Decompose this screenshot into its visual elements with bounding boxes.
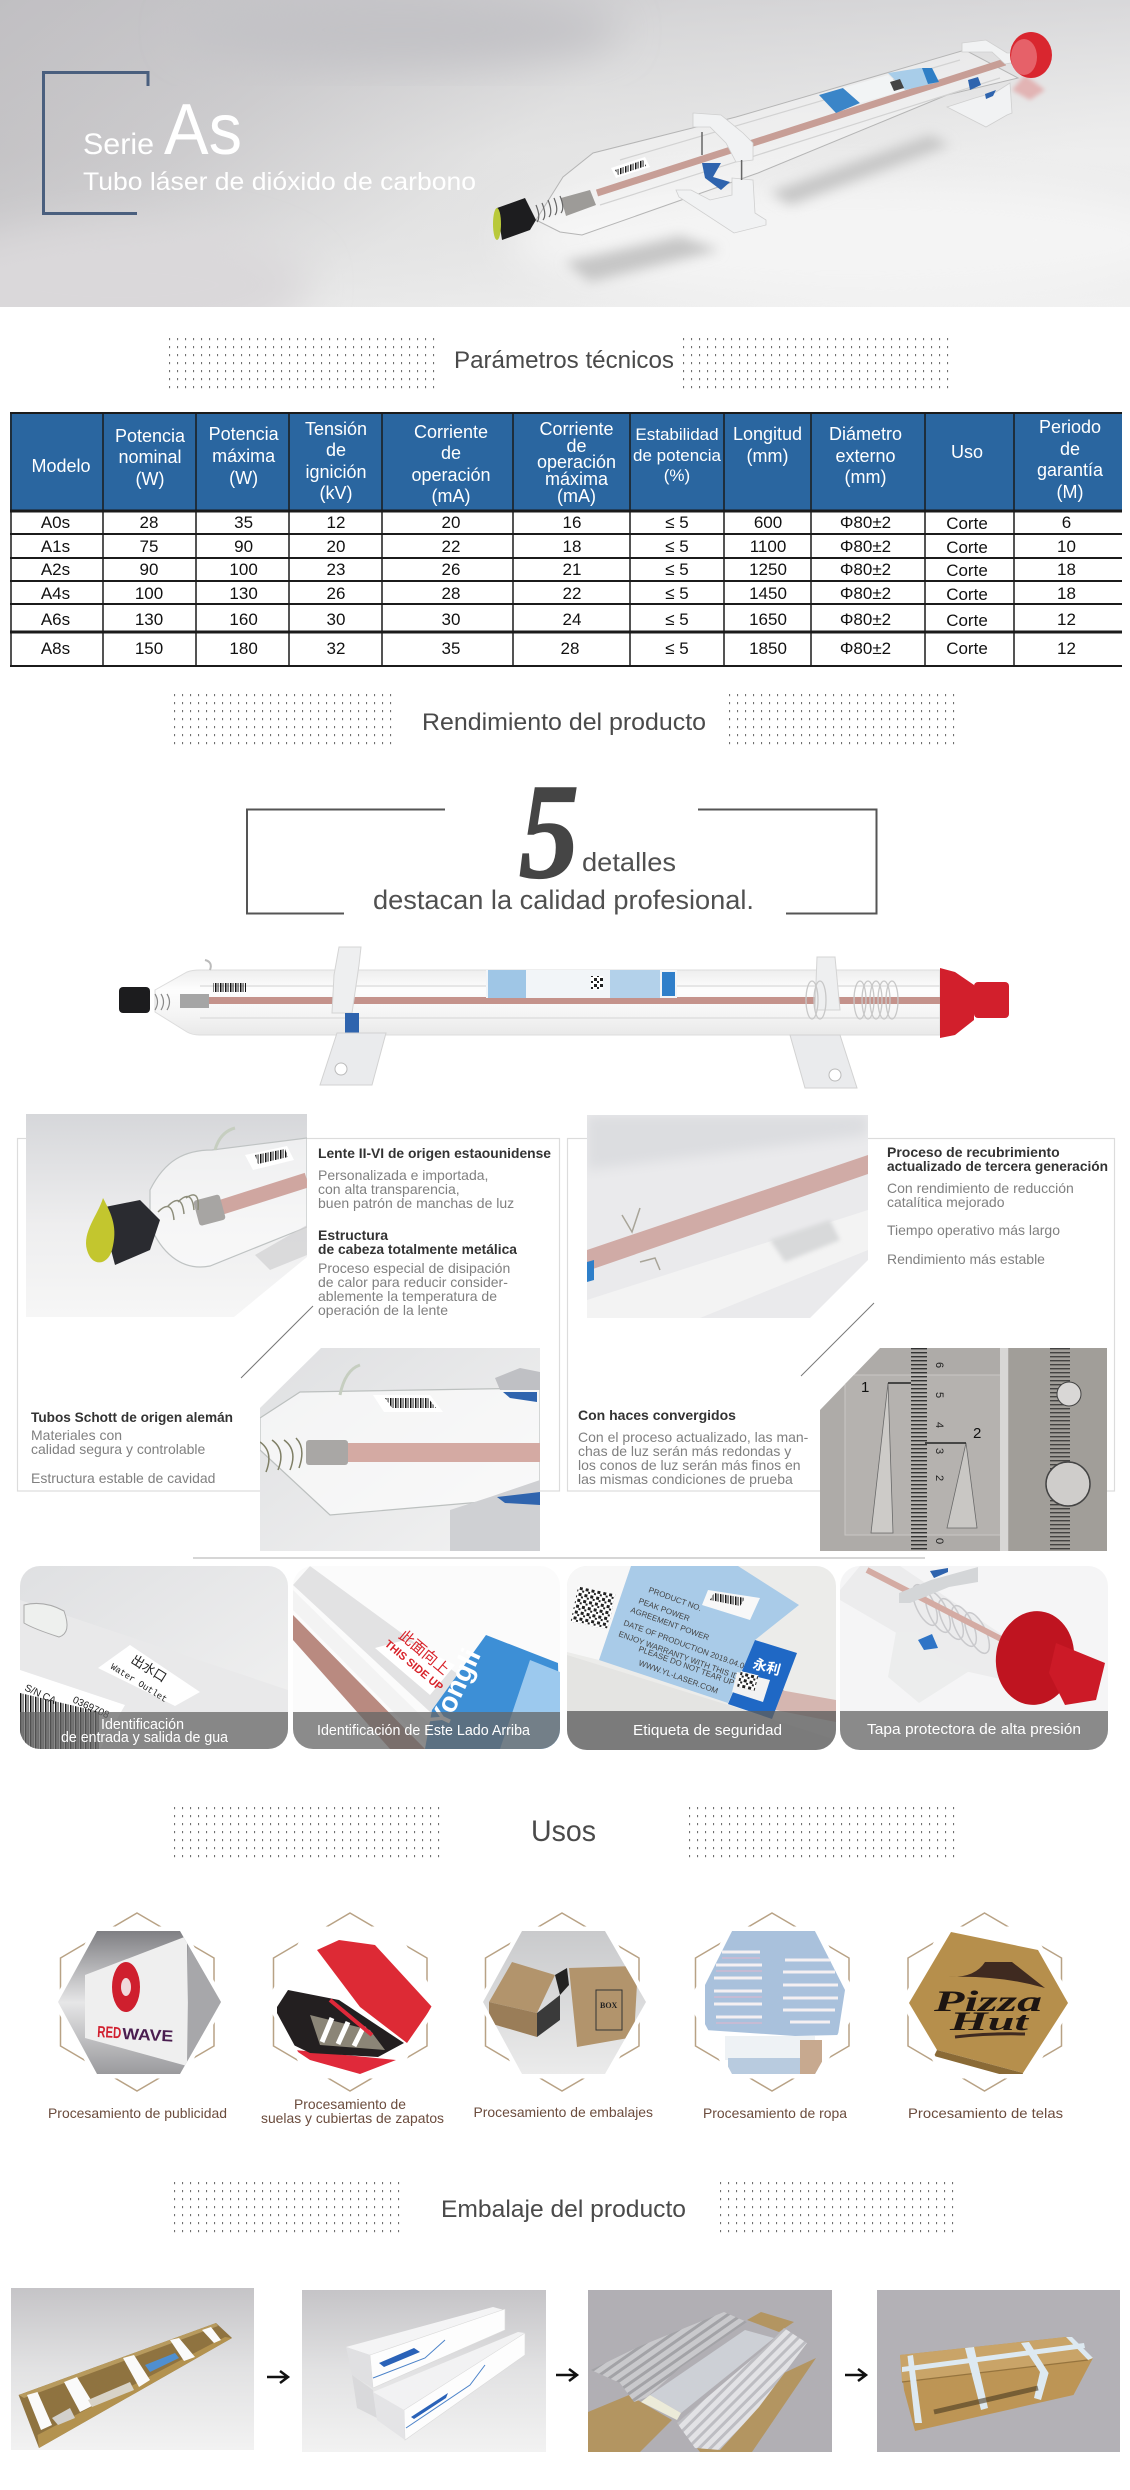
detail photo: lens head	[26, 1114, 307, 1317]
text: Proceso de recubrimiento: Con rendimiento de reducción	[887, 1180, 1074, 1196]
table row A4s: 130	[229, 584, 258, 603]
text: Estructura de cabeza	[318, 1227, 517, 1318]
packaging photo 3: air cushions	[588, 2290, 832, 2452]
label: Procesamiento de embalajes	[474, 2104, 653, 2120]
table row A0s: 12	[327, 513, 345, 532]
hero title: As	[164, 90, 242, 170]
product photo: horizontal laser tube	[119, 947, 1009, 1088]
text: Lente II-VI: con alta transparencia,	[318, 1181, 460, 1197]
table header: Corriente	[414, 422, 488, 442]
red protective cap	[940, 968, 1009, 1038]
text: Con haces convergidos: Con haces convergidos	[578, 1407, 736, 1423]
table header: Estabilidad	[635, 425, 719, 444]
table row A8s: 35	[442, 639, 460, 658]
table header: de	[566, 436, 587, 456]
table row A6s: 24	[563, 610, 581, 629]
this side up tag: THIS SIDE UP	[382, 1638, 445, 1694]
table row A8s: Corte	[946, 639, 988, 658]
pink inner tube	[597, 62, 1005, 193]
photo	[693, 1931, 856, 2074]
number 5: 5	[519, 757, 579, 907]
table row A1s: 18	[563, 537, 581, 556]
panel frame	[568, 1138, 1114, 1491]
table header: (W)	[229, 468, 258, 488]
this side up tag	[375, 1627, 455, 1695]
hero title	[84, 104, 475, 190]
connector line	[241, 1306, 313, 1378]
table row A4s	[41, 584, 1076, 604]
blue label band	[425, 1635, 560, 1749]
table header: Potencia	[115, 426, 186, 446]
text: Lente II-VI	[318, 1145, 551, 1211]
card: this side up identification: Yongli	[423, 1644, 487, 1733]
text: Con haces convergidos: las mismas condiciones de prueba	[578, 1471, 793, 1487]
hexagon outline	[908, 1913, 1062, 2091]
QR code	[571, 1586, 615, 1630]
text: Con haces convergidos	[578, 1407, 809, 1487]
table row A4s: 18	[1057, 584, 1076, 603]
table row A2s: Φ80±2	[840, 560, 891, 579]
product label text: PLEASE DO NOT TEAR UP	[637, 1644, 735, 1687]
table header: (mm)	[747, 446, 788, 466]
table grid	[10, 413, 1122, 666]
table row A4s: Corte	[946, 585, 988, 604]
carton interior	[19, 2323, 232, 2448]
label: suelas y cubiertas de zapatos	[261, 2110, 444, 2126]
arrow 1	[267, 2371, 288, 2383]
label: Procesamiento de	[294, 2096, 406, 2112]
hero laser tube	[493, 32, 1052, 282]
text: Estructura de cabeza: Estructura	[318, 1227, 388, 1243]
table header: (mA)	[557, 486, 596, 506]
caption bar: Identificación de Este Lado Arriba	[317, 1722, 531, 1739]
table header: de	[441, 443, 461, 463]
photo: Hut	[948, 2007, 1029, 2036]
card: high pressure protective cap	[840, 1566, 1108, 1750]
heading bracket	[247, 810, 876, 914]
barcode tag	[611, 157, 650, 178]
table header: de	[1060, 439, 1080, 459]
caption bar: de entrada y salida de gua	[61, 1729, 229, 1746]
text: Tubos Schott: Tubos Schott de origen alemán	[31, 1409, 233, 1425]
table row A2s	[41, 560, 1076, 580]
hero title: Tubo láser de dióxido de carbono	[83, 168, 476, 196]
table row A0s: 28	[140, 513, 158, 532]
carton front wall	[38, 2337, 232, 2448]
photo: BOX	[600, 2001, 618, 2010]
table header: máxima	[212, 446, 276, 466]
table header: nominal	[118, 447, 182, 467]
table row A6s: 130	[135, 610, 163, 629]
spring	[536, 196, 563, 222]
table row A1s: 10	[1057, 537, 1076, 556]
table header: Periodo	[1039, 417, 1101, 437]
details panel: right	[568, 1115, 1114, 1551]
table header: Diámetro	[829, 424, 902, 444]
product label text: PRODUCT NO.	[647, 1585, 703, 1613]
black end cap	[497, 198, 536, 240]
table row A1s: 1100	[750, 537, 786, 556]
clamp	[888, 1567, 978, 1703]
text: Proceso de recubrimiento: catalítica mejorado	[887, 1194, 1005, 1210]
table row A1s	[41, 537, 1076, 557]
table header: operación	[537, 452, 616, 472]
photo	[271, 1931, 434, 2074]
details panel: left	[18, 1114, 560, 1551]
table row A1s: 20	[327, 537, 345, 556]
product label text: WWW.YL-LASER.COM	[637, 1658, 720, 1696]
text: Proceso de recubrimiento: Proceso de recubrimiento	[887, 1144, 1060, 1160]
photo	[483, 1931, 646, 2074]
table row A8s: 32	[327, 639, 345, 658]
safety seal	[728, 1640, 797, 1719]
table row A0s: ≤ 5	[665, 513, 689, 532]
text: Con haces convergidos: los conos de luz serán más finos en	[578, 1457, 801, 1473]
water outlet tag	[98, 1645, 200, 1706]
product label text: DATE OF PRODUCTION 2019.04.09	[622, 1618, 750, 1672]
glass body	[536, 50, 1018, 235]
carton	[900, 2337, 1093, 2431]
table row A6s: 12	[1057, 610, 1076, 629]
packaging photo 1: tube in carton	[11, 2288, 254, 2450]
text: Estructura de cabeza: de cabeza totalmente metálica	[318, 1241, 517, 1257]
card: water inlet and outlet identification	[20, 1566, 288, 1749]
table row A2s: 23	[327, 560, 345, 579]
card: safety label	[567, 1566, 836, 1750]
panel frame	[18, 1138, 560, 1491]
table row A8s: 1850	[749, 639, 787, 658]
table header: de potencia	[633, 446, 721, 465]
table row A4s: 100	[135, 584, 163, 603]
table row A6s: 1650	[749, 610, 787, 629]
table row A4s: ≤ 5	[665, 584, 689, 603]
table row A0s: 600	[754, 513, 782, 532]
table row A0s: 16	[563, 513, 581, 532]
photo	[909, 1932, 1068, 2080]
application 5: fabrics	[906, 1913, 1069, 2121]
table row A4s: A4s	[41, 584, 70, 603]
tube label	[486, 970, 677, 998]
table row A0s: 35	[234, 513, 253, 532]
water outlet tag: Water Outlet	[108, 1662, 169, 1705]
detail photo: beam measurement: 3	[933, 1448, 945, 1454]
clear coil	[912, 1584, 990, 1654]
caption bar	[20, 1712, 288, 1749]
table row A0s: Corte	[946, 514, 988, 533]
table row A6s: 160	[229, 610, 258, 629]
caption bar	[293, 1712, 560, 1749]
light air cushions	[677, 2328, 807, 2450]
table row A8s: Φ80±2	[840, 639, 891, 658]
front clamp	[676, 113, 766, 233]
table row A1s: A1s	[41, 537, 70, 556]
table row A1s: Φ80±2	[840, 537, 891, 556]
table header: (M)	[1057, 482, 1083, 502]
white tray	[650, 2330, 774, 2413]
table row A0s: Φ80±2	[840, 513, 891, 532]
table header: (W)	[136, 469, 164, 489]
lower box	[352, 2332, 525, 2440]
section heading: Rendimiento del producto	[173, 694, 960, 750]
white sticker area	[567, 1566, 631, 1660]
text: Proceso de recubrimiento	[887, 1144, 1108, 1267]
heading text: destacan la calidad profesional.	[373, 885, 754, 915]
photo: Pizza	[932, 1985, 1042, 2018]
table header: de	[326, 440, 346, 460]
caption bar: Identificación	[101, 1716, 184, 1733]
table header: máxima	[545, 469, 609, 489]
divider	[193, 1557, 925, 1559]
table row A2s: Corte	[946, 561, 988, 580]
table row A6s: 30	[327, 610, 345, 629]
table row A4s: 1450	[749, 584, 787, 603]
printed text strip	[934, 2388, 1038, 2412]
arrow 3	[845, 2369, 866, 2381]
text: Estructura de cabeza: Proceso especial de disipación	[318, 1260, 510, 1276]
table header: (mm)	[845, 467, 886, 487]
red mushroom cap	[990, 1606, 1080, 1710]
caption bar: Tapa protectora de alta presión	[867, 1721, 1081, 1738]
table row A0s: 20	[442, 513, 460, 532]
text: Tubos Schott: Materiales con	[31, 1427, 122, 1443]
table header: garantía	[1037, 460, 1104, 480]
hero bracket	[44, 72, 148, 214]
application 3: packaging	[474, 1913, 653, 2120]
text: Tubos Schott	[31, 1409, 233, 1486]
text: Estructura de cabeza: ablemente la temperatura de	[318, 1288, 497, 1304]
table header	[10, 413, 1122, 511]
dark air cushions	[591, 2312, 747, 2402]
left clamp	[320, 947, 386, 1085]
table row A8s: A8s	[41, 639, 70, 658]
section heading: Parámetros técnicos: Parámetros técnicos	[454, 347, 674, 374]
right clamp	[790, 957, 898, 1088]
text: Lente II-VI: buen patrón de manchas de luz	[318, 1195, 514, 1211]
section heading: Embalaje del producto	[173, 2182, 960, 2238]
label: Procesamiento de telas	[908, 2105, 1063, 2121]
text: Proceso de recubrimiento: actualizado de tercera generación	[887, 1158, 1108, 1174]
detail photo: beam measurement: 5	[933, 1392, 945, 1398]
table row A6s: A6s	[41, 610, 70, 629]
text: Lente II-VI: Personalizada e importada,	[318, 1167, 488, 1183]
text: Lente II-VI: Lente II-VI de origen estaounidense	[318, 1145, 551, 1161]
hexagon outline	[274, 1913, 427, 2091]
caption bar: Etiqueta de seguridad	[633, 1722, 782, 1739]
upper box	[346, 2307, 505, 2388]
silver electrode	[561, 190, 596, 216]
caption bar	[840, 1711, 1108, 1750]
label	[261, 2096, 444, 2126]
table row A8s: ≤ 5	[665, 639, 689, 658]
photo: WAVE	[122, 2026, 174, 2046]
application 4: clothing	[693, 1913, 856, 2121]
section heading: Parámetros técnicos	[168, 338, 953, 394]
table header: externo	[835, 446, 896, 466]
packed tube	[88, 2382, 134, 2407]
hexagon outline	[486, 1913, 639, 2091]
table row A8s: 12	[1057, 639, 1076, 658]
table row A2s: 21	[563, 560, 581, 579]
barcode tag: S/N CA	[23, 1683, 58, 1707]
table row A2s: ≤ 5	[665, 560, 689, 579]
text: Estructura de cabeza: de calor para reducir consider-	[318, 1274, 508, 1290]
this side up tag: 此面向上	[395, 1627, 452, 1679]
table header: Modelo	[31, 456, 91, 476]
carton flaps	[588, 2312, 816, 2452]
table row A6s	[41, 610, 1076, 630]
photo	[58, 1931, 221, 2074]
table row A2s: 26	[442, 560, 460, 579]
section heading: Embalaje del producto: Embalaje del producto	[441, 2196, 686, 2223]
detail photo: beam measurement: 2	[933, 1475, 945, 1481]
section heading: Usos: Usos	[531, 1815, 596, 1848]
table row A2s: 90	[140, 560, 158, 579]
table header: (%)	[664, 466, 690, 485]
table header: (kV)	[320, 483, 352, 503]
product label text: PEAK POWER	[637, 1596, 691, 1623]
text: Proceso de recubrimiento: Rendimiento más estable	[887, 1251, 1045, 1267]
detail photo: beam measurement: 1	[861, 1379, 869, 1396]
heading: 5 detalles	[247, 757, 876, 915]
packing tape	[902, 2337, 1093, 2423]
hero title: Serie	[83, 128, 154, 161]
barcode sticker	[702, 1590, 760, 1620]
table row A0s: A0s	[41, 513, 70, 532]
table row A8s	[41, 639, 1076, 658]
blue product label	[599, 1566, 799, 1703]
hexagon outline	[696, 1913, 849, 2091]
red cap	[1010, 32, 1052, 78]
table header: Longitud	[733, 424, 802, 444]
text: Con haces convergidos: chas de luz serán más redondas y	[578, 1443, 791, 1459]
product label text	[618, 1587, 784, 1694]
text: Estructura de cabeza: operación de la lente	[318, 1302, 448, 1318]
table row A1s: 75	[140, 537, 158, 556]
table row A4s: 22	[563, 584, 581, 603]
tube label	[819, 88, 860, 113]
table row A6s: 30	[442, 610, 460, 629]
table header: ignición	[305, 462, 367, 482]
detail photo: beam measurement: 4	[933, 1422, 945, 1428]
barcode tag: 0369708	[71, 1695, 111, 1721]
product label text: ENJOY WARRANTY WITH THIS IDENTIFICATION	[617, 1629, 792, 1700]
table row A0s	[41, 513, 1071, 533]
heading text	[373, 847, 754, 915]
table header: Corriente	[539, 419, 614, 439]
section heading: Usos	[173, 1807, 960, 1863]
tube shadows	[565, 135, 950, 282]
table row A4s: 28	[442, 584, 460, 603]
connector line	[801, 1303, 874, 1376]
text: Proceso de recubrimiento: Tiempo operativo más largo	[887, 1222, 1060, 1238]
table row A2s: 100	[229, 560, 258, 579]
detail photo: coating	[587, 1115, 868, 1318]
packaging photo 4: sealed carton	[877, 2290, 1120, 2452]
application 1: advertising	[48, 1913, 227, 2121]
table row A2s: 1250	[749, 560, 787, 579]
table row A1s: 90	[234, 537, 253, 556]
table row A1s: ≤ 5	[665, 537, 689, 556]
arrow 2	[556, 2369, 577, 2381]
table header: Potencia	[209, 424, 280, 444]
hero banner	[0, 0, 1130, 307]
table row A4s: 26	[327, 584, 345, 603]
label: Procesamiento de publicidad	[48, 2105, 227, 2121]
table row A8s: 28	[561, 639, 579, 658]
text: Con haces convergidos: Con el proceso actualizado, las man-	[578, 1429, 809, 1445]
heading text: detalles	[582, 847, 676, 877]
table header: Tensión	[305, 419, 367, 439]
table row A2s: A2s	[41, 560, 70, 579]
caption bar	[567, 1711, 836, 1750]
table row A8s: 180	[229, 639, 258, 658]
rear clamp	[947, 40, 1016, 127]
table row A1s: 22	[442, 537, 460, 556]
detail photo: beam measurement: 0	[933, 1538, 945, 1544]
photo: RED	[97, 2024, 122, 2042]
product label text: AGREEMENT POWER	[629, 1605, 711, 1642]
table row A6s: Corte	[946, 611, 988, 630]
table header: operación	[411, 465, 491, 485]
text: Tubos Schott: calidad segura y controlable	[31, 1441, 206, 1457]
detail photo: beam measurement	[820, 1348, 1107, 1551]
section heading: Rendimiento del producto: Rendimiento del producto	[422, 709, 706, 736]
barcode tag	[20, 1670, 125, 1749]
foam blocks	[27, 2327, 221, 2430]
tube cap	[119, 987, 150, 1013]
table header: Uso	[951, 442, 983, 462]
table row A1s: Corte	[946, 538, 988, 557]
table row A8s: 150	[135, 639, 163, 658]
text: Tubos Schott: Estructura estable de cavidad	[31, 1470, 215, 1486]
table row A0s: 6	[1062, 513, 1071, 532]
table row A4s: Φ80±2	[840, 584, 891, 603]
application 2: shoe soles and uppers	[261, 1913, 444, 2126]
specifications table	[10, 413, 1122, 666]
table row A6s: ≤ 5	[665, 610, 689, 629]
detail photo: beam measurement: 6	[933, 1362, 945, 1368]
packaging photo 2: white boxes	[302, 2290, 546, 2452]
hexagon outline	[60, 1913, 214, 2091]
detail photo: beam measurement: 2	[973, 1425, 981, 1442]
label: Procesamiento de ropa	[703, 2105, 847, 2121]
safety seal: 永利	[751, 1655, 782, 1678]
water outlet tag: 出水口	[128, 1652, 169, 1685]
card: this side up identification	[293, 1566, 560, 1749]
table row A6s: Φ80±2	[840, 610, 891, 629]
table header: (mA)	[432, 486, 470, 506]
detail photo: Schott tube	[260, 1348, 541, 1551]
table row A2s: 18	[1057, 560, 1076, 579]
